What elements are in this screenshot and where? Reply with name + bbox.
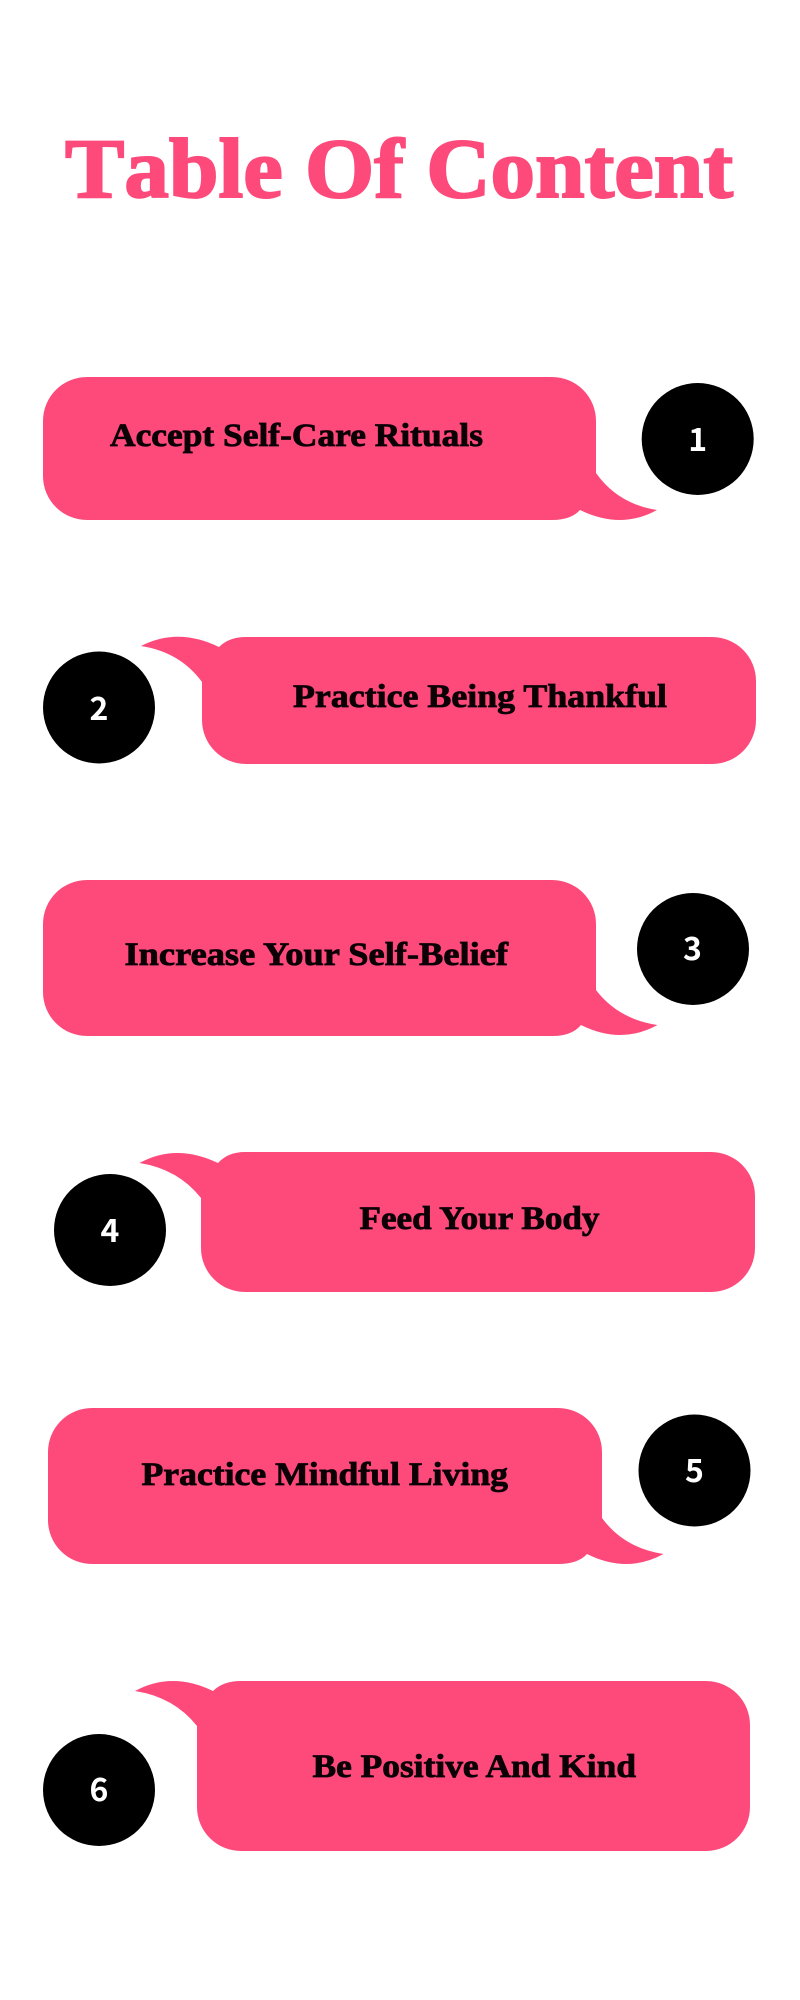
label 3: Increase Your Self-Belief <box>124 937 509 973</box>
number badge 4: 4 <box>101 1206 119 1252</box>
item 6: Be Positive And Kind <box>43 1681 750 1851</box>
number badge 1: 1 <box>688 415 707 461</box>
item 1: Accept Self-Care Rituals <box>43 377 754 520</box>
speech bubble 3 <box>43 880 658 1036</box>
label 4: Feed Your Body <box>360 1201 600 1237</box>
number badge 5: 5 <box>685 1446 704 1492</box>
number badge 6: 6 <box>90 1765 108 1811</box>
title: Table Of Content <box>65 122 733 216</box>
speech bubble 6 <box>135 1681 750 1851</box>
speech bubble 4 <box>140 1152 755 1292</box>
item 2: Practice Being Thankful <box>43 637 756 764</box>
speech bubble 5 <box>48 1408 664 1564</box>
number badge 4 <box>54 1174 166 1286</box>
item 5: Practice Mindful Living <box>48 1408 750 1564</box>
label 5: Practice Mindful Living <box>142 1457 509 1493</box>
number badge 6 <box>43 1734 155 1846</box>
label 6: Be Positive And Kind <box>312 1749 636 1785</box>
number badge 2: 2 <box>90 684 108 730</box>
number badge 5 <box>638 1414 750 1526</box>
item 4: Feed Your Body <box>54 1152 755 1292</box>
number badge 1 <box>642 383 754 495</box>
label 1: Accept Self-Care Rituals <box>110 418 483 454</box>
number badge 3: 3 <box>683 924 702 970</box>
label 2: Practice Being Thankful <box>293 679 667 715</box>
item 3: Increase Your Self-Belief <box>43 880 749 1036</box>
number badge 2 <box>43 652 155 764</box>
speech bubble 2 <box>141 637 756 764</box>
speech bubble 1 <box>43 377 657 520</box>
number badge 3 <box>637 893 749 1005</box>
